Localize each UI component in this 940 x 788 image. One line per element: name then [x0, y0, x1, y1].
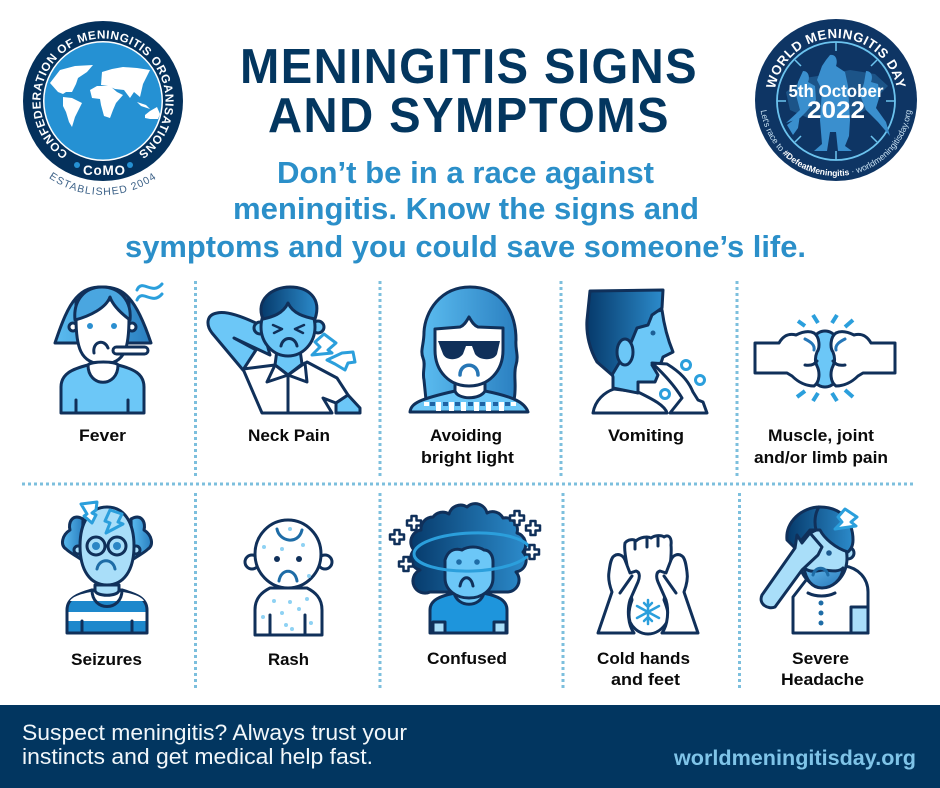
logo: Confederation of Meningitis Organisations: CONFEDERATION OF MENINGITIS ORGANISATIONS [32, 30, 174, 158]
panel: vomiting [587, 290, 707, 445]
footer message [22, 720, 407, 769]
label: Severe [792, 649, 849, 668]
panel: neck pain [208, 287, 360, 445]
icon: rash [245, 520, 332, 635]
label: Headache [781, 670, 864, 689]
label [597, 649, 690, 689]
panel: avoiding bright light [410, 287, 528, 467]
icon: avoiding bright light [410, 287, 528, 412]
label: Muscle, joint [768, 426, 874, 445]
logo: World Meningitis Day: WORLD MENINGITIS DAY [766, 28, 906, 87]
icon: seizures [63, 502, 151, 633]
label: Fever [79, 426, 126, 445]
icon: fever [55, 284, 162, 413]
subtitle: symptoms and you could save someone’s life. [125, 230, 806, 264]
icon: vomiting [587, 290, 707, 413]
label: and feet [611, 670, 680, 689]
subtitle [125, 156, 806, 264]
panel: confused [390, 504, 540, 668]
logo: World Meningitis Day [755, 19, 917, 181]
footer message: Suspect meningitis? Always trust your [22, 720, 407, 745]
icon: cold hands and feet [598, 536, 698, 634]
panel: cold hands and feet [597, 536, 698, 689]
label: Rash [268, 650, 309, 669]
subtitle: meningitis. Know the signs and [233, 192, 699, 226]
footer website: worldmeningitisday.org [673, 746, 916, 770]
icon: confused [390, 504, 540, 633]
label [421, 426, 514, 467]
title [240, 40, 698, 143]
panel: severe headache [761, 507, 868, 689]
label: Confused [427, 649, 507, 668]
panel: seizures [63, 502, 151, 669]
footer band [0, 705, 940, 788]
label [781, 649, 864, 689]
panel: rash [245, 520, 332, 669]
footer message: instincts and get medical help fast. [22, 744, 373, 769]
label: and/or limb pain [754, 448, 888, 467]
icon: muscle, joint and/or limb pain [755, 315, 895, 401]
label: Cold hands [597, 649, 690, 668]
title: MENINGITIS SIGNS [240, 40, 698, 94]
subtitle: Don’t be in a race against [277, 156, 654, 190]
label: Seizures [71, 650, 142, 669]
icon: severe headache [761, 507, 868, 633]
label: Neck Pain [248, 426, 330, 445]
logo: World Meningitis Day: 2022 [807, 97, 865, 124]
logo: Confederation of Meningitis Organisations: ESTABLISHED 2004 [49, 172, 156, 196]
logo: Confederation of Meningitis Organisations: CoMO [83, 163, 125, 178]
label: Vomiting [608, 426, 684, 445]
panel: fever [55, 284, 162, 445]
logo: World Meningitis Day: 5th October [788, 81, 884, 101]
logo: World Meningitis Day: Let's race to #DefeatMeningitis · worldmeningitisday.org [760, 110, 913, 178]
label: bright light [421, 448, 514, 467]
label [754, 426, 888, 467]
icon: neck pain [208, 287, 360, 413]
title: AND SYMPTOMS [268, 89, 670, 143]
label: Avoiding [430, 426, 502, 445]
panel: muscle, joint and/or limb pain [754, 315, 895, 467]
